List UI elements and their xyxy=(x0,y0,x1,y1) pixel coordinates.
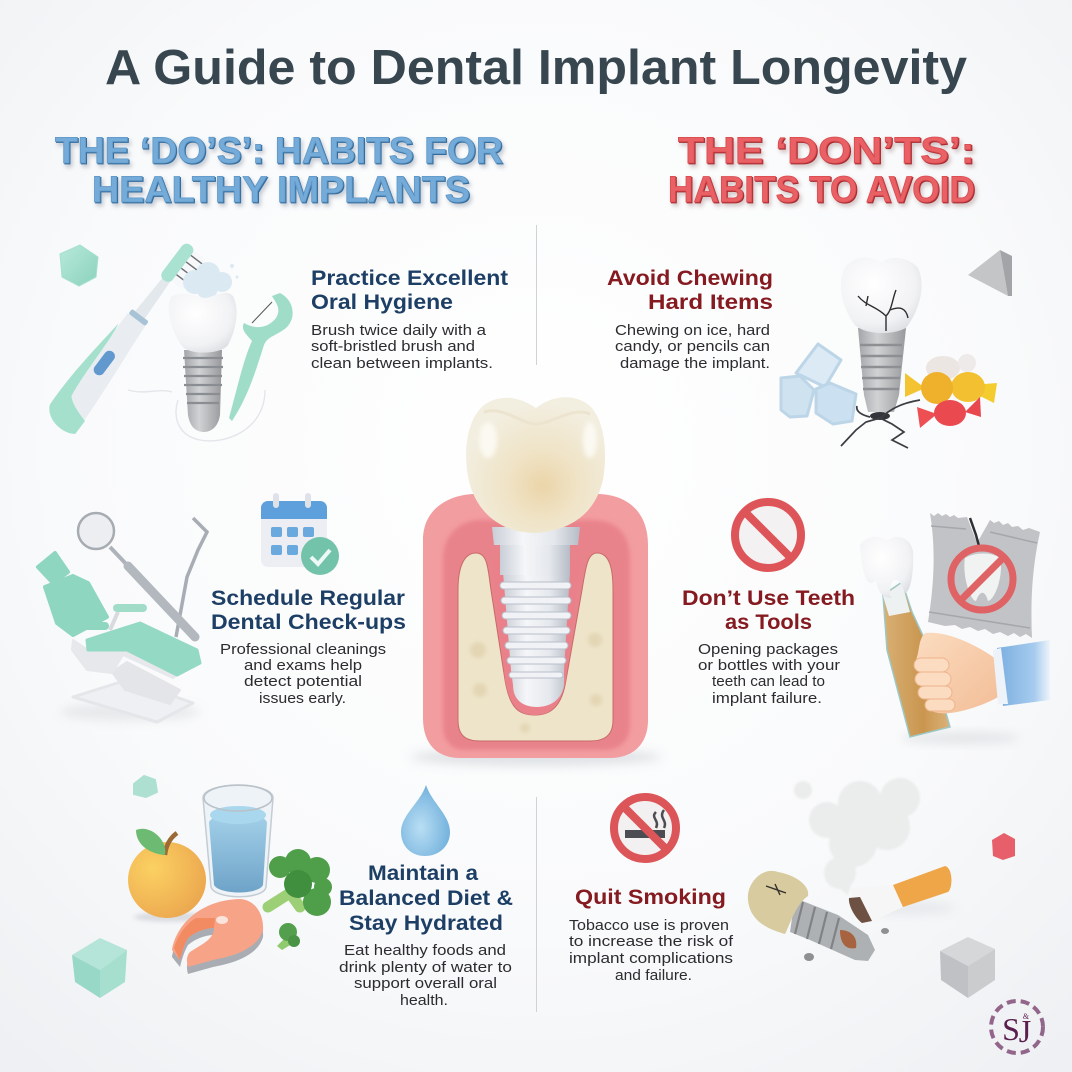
text: diet body: drink plenty of water to xyxy=(339,960,512,976)
text: hard items body: Chewing on ice, hard xyxy=(615,323,770,339)
icon: grey triangle xyxy=(968,250,1012,296)
text: oral hygiene heading xyxy=(311,267,508,314)
icon: water droplet xyxy=(401,785,450,856)
bone xyxy=(458,553,613,741)
icon: prohibition sign xyxy=(735,502,801,568)
text: diet body: health. xyxy=(400,993,448,1009)
text: diet heading: Balanced Diet & xyxy=(339,887,513,910)
bone texture xyxy=(470,633,602,733)
text: tools heading: as Tools xyxy=(725,611,812,634)
icon: tooth gripping bottle xyxy=(860,537,913,598)
text: check-ups heading: Dental Check-ups xyxy=(211,611,406,634)
text: smoking body: and failure. xyxy=(615,968,692,984)
title: A Guide to Dental Implant Longevity xyxy=(105,41,967,95)
text: smoking body: implant complications xyxy=(569,951,733,967)
heading: don'ts: THE ‘DON’TS’: xyxy=(678,130,975,171)
text: tools body: implant failure. xyxy=(712,691,822,707)
text: smoking body xyxy=(569,918,734,984)
heading: do's: THE ‘DO’S’: HABITS FOR xyxy=(55,130,503,171)
text: oral hygiene body xyxy=(311,323,493,372)
icon: torn packet xyxy=(928,513,1040,638)
icon: ground crack xyxy=(841,400,920,448)
icon: apple xyxy=(128,829,206,922)
text: hard items heading: Hard Items xyxy=(648,291,773,314)
heading: do's xyxy=(55,130,503,210)
logo: S&J wreath: & xyxy=(1023,1012,1030,1021)
text: check-ups heading: Schedule Regular xyxy=(211,587,405,610)
icon: white crown with implant xyxy=(169,293,237,432)
text: oral hygiene heading: Practice Excellent xyxy=(311,267,508,290)
icon: dental chair xyxy=(38,553,200,722)
icon: dental probe xyxy=(176,518,207,637)
inner gum block xyxy=(443,520,630,750)
icon: small broccoli xyxy=(277,923,300,950)
icon: electric toothbrush xyxy=(42,235,208,438)
heading: don'ts: HABITS TO AVOID xyxy=(668,169,975,210)
icon: ash specks xyxy=(804,928,889,961)
icon: broccoli xyxy=(268,849,332,916)
text: tools heading: Don’t Use Teeth xyxy=(682,587,855,610)
text: hard items heading xyxy=(607,267,773,314)
heading: don'ts xyxy=(668,130,975,210)
panel: quit smoking xyxy=(569,778,1015,998)
text: check-ups body: and exams help xyxy=(244,658,362,674)
text: check-ups body: Professional cleanings xyxy=(220,642,386,658)
text: oral hygiene body: Brush twice daily with a xyxy=(311,323,487,339)
text: oral hygiene body: soft-bristled brush and xyxy=(311,339,475,355)
text: tools body: or bottles with your xyxy=(698,658,840,674)
text: check-ups body: issues early. xyxy=(259,691,346,707)
text: tools heading xyxy=(682,587,855,634)
text: diet heading: Maintain a xyxy=(368,862,478,885)
icon: no smoking sign xyxy=(614,797,676,859)
icon: sleeve xyxy=(993,640,1050,706)
heading: do's: HEALTHY IMPLANTS xyxy=(92,169,470,210)
logo: S&J wreath xyxy=(991,1001,1043,1053)
text: check-ups body: detect potential xyxy=(244,674,362,690)
text: diet body: Eat healthy foods and xyxy=(344,943,506,959)
crown xyxy=(466,397,605,533)
inner gum xyxy=(492,560,580,715)
icon: mint cube xyxy=(72,938,127,998)
implant screw xyxy=(492,527,580,707)
text: diet heading: Stay Hydrated xyxy=(349,912,503,935)
icon: dental mirror xyxy=(78,513,195,637)
icon: calendar xyxy=(261,493,339,575)
panel: don't use teeth as tools xyxy=(682,502,1050,744)
text: check-ups body xyxy=(220,642,386,707)
text: tools body: Opening packages xyxy=(698,642,838,658)
icon: wrapped candies xyxy=(905,354,997,428)
text: diet body xyxy=(339,943,512,1009)
icon: cigarette xyxy=(849,866,955,923)
text: smoking body: Tobacco use is proven xyxy=(569,918,729,934)
text: check-ups heading xyxy=(211,587,406,634)
prohibition bar xyxy=(745,512,791,558)
icon: salmon steak xyxy=(172,899,263,974)
panel: schedule regular check-ups xyxy=(38,493,406,722)
text: tools body xyxy=(698,642,840,707)
text: hard items body xyxy=(615,323,770,372)
logo: S&J wreath: S xyxy=(1002,1011,1020,1047)
text: diet heading xyxy=(339,862,513,935)
panel: balanced diet xyxy=(72,776,513,1009)
panel: avoid chewing hard items xyxy=(607,250,1012,448)
icon: damaged implant xyxy=(748,871,875,961)
central implant model xyxy=(411,397,661,766)
icon: glass of water xyxy=(203,785,273,897)
icon: hand xyxy=(914,633,998,713)
icon: foam xyxy=(183,262,238,299)
icon: bottle xyxy=(883,582,1020,744)
icon: cracked tooth implant xyxy=(841,257,922,412)
icon: red cube xyxy=(992,833,1015,860)
text: oral hygiene body: clean between implants. xyxy=(311,356,493,372)
text: hard items heading: Avoid Chewing xyxy=(607,267,773,290)
icon: small mint stone xyxy=(134,776,157,797)
text: smoking body: to increase the risk of xyxy=(569,934,734,950)
text: tools body: teeth can lead to xyxy=(712,674,825,690)
logo: S&J wreath: J xyxy=(1019,1013,1031,1049)
panel: practice excellent oral hygiene xyxy=(42,235,508,441)
text: hard items body: damage the implant. xyxy=(620,356,770,372)
icon: floss pick xyxy=(229,293,293,421)
text: smoking heading: Quit Smoking xyxy=(575,886,726,909)
gum block xyxy=(423,494,648,758)
icon: mint hexagon xyxy=(60,245,98,286)
icon: smoke cloud xyxy=(794,778,920,895)
icon: floss string xyxy=(128,390,265,441)
icon: grey cube xyxy=(940,937,995,998)
text: oral hygiene heading: Oral Hygiene xyxy=(311,291,453,314)
text: diet body: support overall oral xyxy=(354,976,497,992)
text: hard items body: candy, or pencils can xyxy=(615,339,770,355)
icon: ice cubes xyxy=(781,344,856,424)
